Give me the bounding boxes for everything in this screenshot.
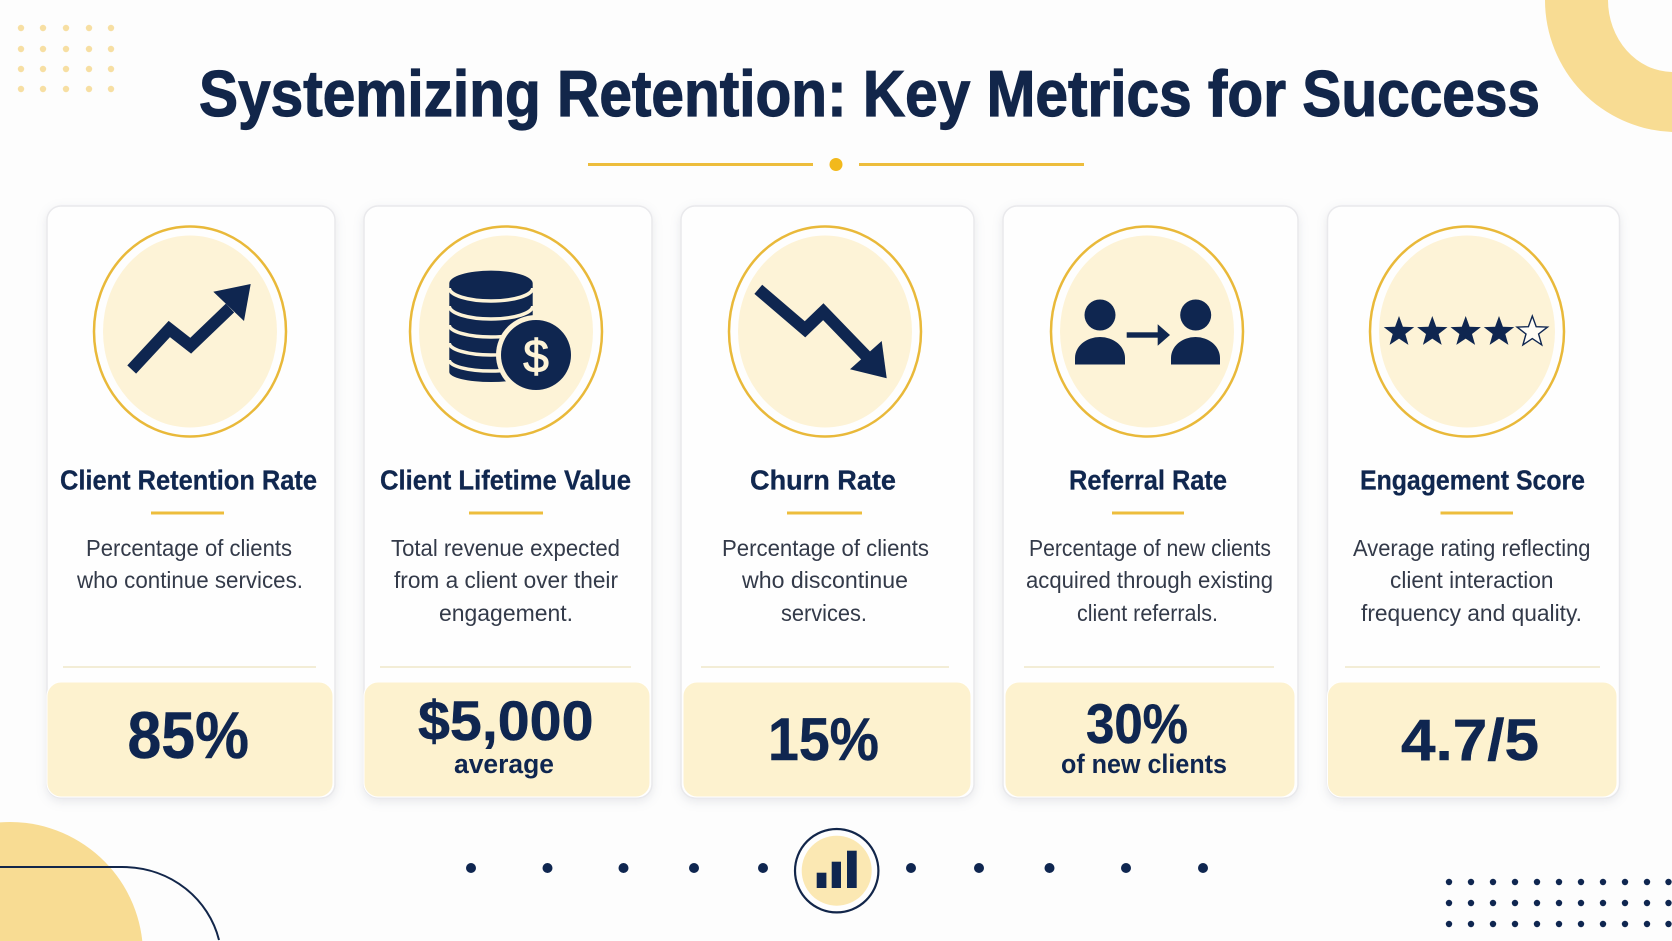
heading: Engagement Score [1360, 464, 1585, 496]
description: Percentage of clients [722, 535, 929, 561]
heading: Churn Rate [750, 464, 896, 496]
decoration: top-right ring [1545, 0, 1672, 132]
description: Percentage of clients [86, 535, 292, 561]
icon: falling arrow [729, 226, 921, 436]
metric: 85% [47, 682, 333, 797]
panel: referral rate [1003, 206, 1298, 798]
description: acquired through existing [1026, 567, 1273, 593]
metric: $5,000 average: average [454, 749, 554, 779]
metric: $5,000 average [364, 682, 650, 797]
metric: 30% of new clients [1005, 682, 1295, 797]
description: Total revenue expected [391, 535, 620, 561]
pagination dots [466, 863, 1208, 873]
icon: coin stack with dollar: $ [523, 330, 549, 382]
description: engagement. [439, 600, 573, 626]
icon: bar chart badge [795, 829, 878, 912]
description: Average rating reflecting [1353, 535, 1590, 561]
metric: 4.7/5 [1328, 682, 1617, 797]
metric: 15% [683, 682, 971, 797]
heading: Client Lifetime Value [380, 464, 631, 496]
decoration: bottom-right dot grid [1446, 879, 1672, 927]
panel: churn rate [681, 206, 974, 798]
heading: Client Retention Rate [60, 464, 317, 496]
description [722, 535, 929, 626]
panel: client lifetime value [364, 206, 652, 798]
description: who continue services. [76, 567, 303, 593]
description: frequency and quality. [1361, 600, 1582, 626]
description: who discontinue [741, 567, 908, 593]
panel: engagement score [1328, 206, 1620, 798]
description: client interaction [1390, 567, 1554, 593]
decoration: top-left dot grid [18, 25, 114, 92]
description: client referrals. [1077, 600, 1218, 626]
icon: star rating [1370, 226, 1564, 436]
description [391, 535, 620, 626]
description: Percentage of new clients [1029, 535, 1271, 561]
metric: $5,000 average: $5,000 [418, 689, 594, 752]
icon: rising arrow [94, 226, 286, 436]
title: Systemizing Retention: Key Metrics for Success [199, 57, 1540, 130]
metric: 30% of new clients: of new clients [1061, 749, 1227, 779]
heading: Referral Rate [1069, 464, 1227, 496]
metric: 4.7/5: 4.7/5 [1401, 708, 1539, 773]
panel: client retention rate [47, 206, 335, 798]
metric: 85%: 85% [128, 698, 249, 772]
description [1353, 535, 1590, 626]
description: services. [781, 600, 867, 626]
metric: 15%: 15% [768, 706, 879, 773]
description [76, 535, 303, 593]
description: from a client over their [394, 567, 618, 593]
description [1026, 535, 1273, 626]
metric: 30% of new clients: 30% [1086, 692, 1188, 755]
decoration: bottom-left circle and curve [0, 822, 219, 941]
icon: coin stack with dollar [410, 226, 602, 436]
icon: referral people [1051, 226, 1243, 436]
title divider [588, 158, 1084, 171]
